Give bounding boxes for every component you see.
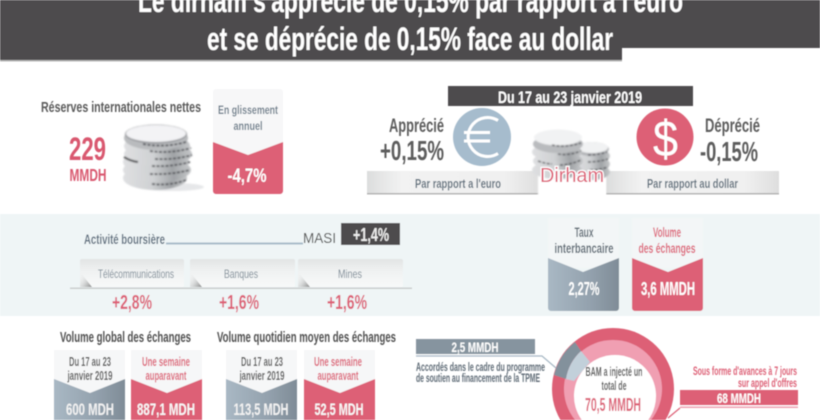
label: apprécié: +0,15% (380, 135, 444, 166)
panel: réserves internationales (41, 89, 283, 194)
card: taux interbancaire (548, 218, 619, 311)
panel: volume quotidien moyen (217, 330, 396, 420)
card: volume des échanges: des échanges (638, 241, 696, 256)
icon: euro (453, 108, 511, 166)
card: volume des échanges: 3,6 MMDH (641, 279, 695, 299)
heading: réserves: Réserves internationales nettes (41, 100, 201, 116)
card: 887,1 MDH: auparavant (146, 369, 187, 383)
values: secteurs (112, 292, 367, 314)
card: taux interbancaire: 2,27% (568, 279, 600, 299)
bar: par rapport à l'euro (367, 171, 539, 194)
tab: banques (190, 259, 295, 287)
label: déprécié: -0,15% (700, 136, 758, 167)
card: 887,1 MDH: 887,1 MDH (137, 400, 195, 419)
label: dirham: Dirham (540, 165, 604, 187)
callout: 68 MMDH: 68 MMDH (717, 390, 761, 406)
callout: 2,5 MMDH: 2,5 MMDH (452, 339, 498, 355)
panel: injections BAM (416, 328, 798, 420)
values: secteurs: +1,6% (327, 292, 367, 314)
icon: dirham coins (532, 130, 610, 200)
tab: banques: Banques (224, 267, 258, 281)
title band (0, 0, 820, 62)
card: volume des échanges (632, 218, 703, 311)
icon: coin stack (123, 124, 204, 191)
value: 229 MMDH: MMDH (70, 165, 106, 185)
card: 887,1 MDH (131, 350, 202, 420)
icon: dollar (636, 108, 694, 167)
tab: télécommunications: Télécommunications (98, 267, 174, 281)
date banner: Du 17 au 23 janvier 2019 (498, 89, 642, 107)
values: secteurs: +1,6% (219, 292, 259, 314)
label: apprécié (380, 116, 444, 166)
card: en glissement annuel: -4,7% (228, 166, 267, 187)
title text (138, 0, 683, 57)
card: 600 MDH: 600 MDH (66, 400, 114, 419)
tab: télécommunications (80, 259, 184, 287)
icon: dollar: $ (653, 110, 678, 167)
card: volume des échanges: Volume (653, 225, 681, 240)
panel: volume global des échanges (54, 330, 202, 420)
card: 887,1 MDH: Une semaine (142, 355, 190, 369)
card: taux interbancaire: interbancaire (554, 241, 614, 256)
chart: donut (552, 328, 674, 420)
card: en glissement annuel: En glissement (218, 103, 278, 117)
donut text: total de (602, 379, 627, 393)
label: déprécié (700, 116, 760, 167)
bar: par rapport à l'euro: Par rapport a l'euro (415, 176, 501, 191)
value: 229 MMDH (69, 131, 106, 185)
card: en glissement annuel (213, 89, 283, 194)
heading: volume global: Volume global des échanges (60, 330, 191, 346)
donut text: 70,5 MMDH (585, 395, 641, 415)
bar: par rapport au dollar (606, 171, 779, 194)
panel: activité boursière background (0, 214, 820, 316)
card: 113,5 MDH (226, 350, 297, 420)
panel: cours de change (367, 86, 779, 200)
callout: 2,5 MMDH: de soutien au financement de la TPME (416, 373, 540, 385)
card: 52,5 MDH (304, 350, 375, 420)
card: 600 MDH: Du 17 au 23 (69, 355, 111, 369)
tab: mines (298, 259, 403, 287)
card: 52,5 MDH: auparavant (318, 369, 359, 383)
label: apprécié: Apprécié (389, 116, 444, 137)
card: 52,5 MDH: Une semaine (314, 355, 362, 369)
callout: 2,5 MMDH: Accordés dans le cadre du programme (416, 362, 545, 374)
card: taux interbancaire: Taux (574, 225, 594, 240)
value: MASI +1,4%: +1,4% (353, 225, 389, 245)
date banner (448, 86, 693, 107)
card: 600 MDH (54, 350, 125, 420)
callout: 2,5 MMDH (416, 339, 556, 385)
donut text: BAM a injecté un (586, 365, 642, 379)
label: déprécié: Déprécié (705, 116, 760, 137)
card: 52,5 MDH: 52,5 MDH (314, 400, 364, 419)
tab: mines: Mines (338, 267, 362, 281)
card: 113,5 MDH: janvier 2019 (239, 369, 285, 383)
card: 600 MDH: janvier 2019 (67, 369, 113, 383)
values: secteurs: +2,8% (112, 292, 152, 314)
bar: par rapport au dollar: Par rapport au dollar (647, 176, 738, 191)
value: 229 MMDH: 229 (69, 131, 106, 167)
value: MASI +1,4% (341, 223, 400, 245)
card: 113,5 MDH: 113,5 MDH (234, 400, 288, 419)
heading: activité boursière: Activité boursière (84, 232, 165, 247)
card: 113,5 MDH: Du 17 au 23 (241, 355, 283, 369)
callout: 68 MMDH (668, 366, 798, 418)
card: en glissement annuel: annuel (234, 119, 262, 133)
heading: volume quotidien: Volume quotidien moyen des échanges (217, 330, 396, 346)
title text: et se déprécie de 0,15% face au dollar (207, 21, 613, 57)
label: MASI: MASI (303, 230, 336, 247)
donut text (585, 365, 642, 415)
